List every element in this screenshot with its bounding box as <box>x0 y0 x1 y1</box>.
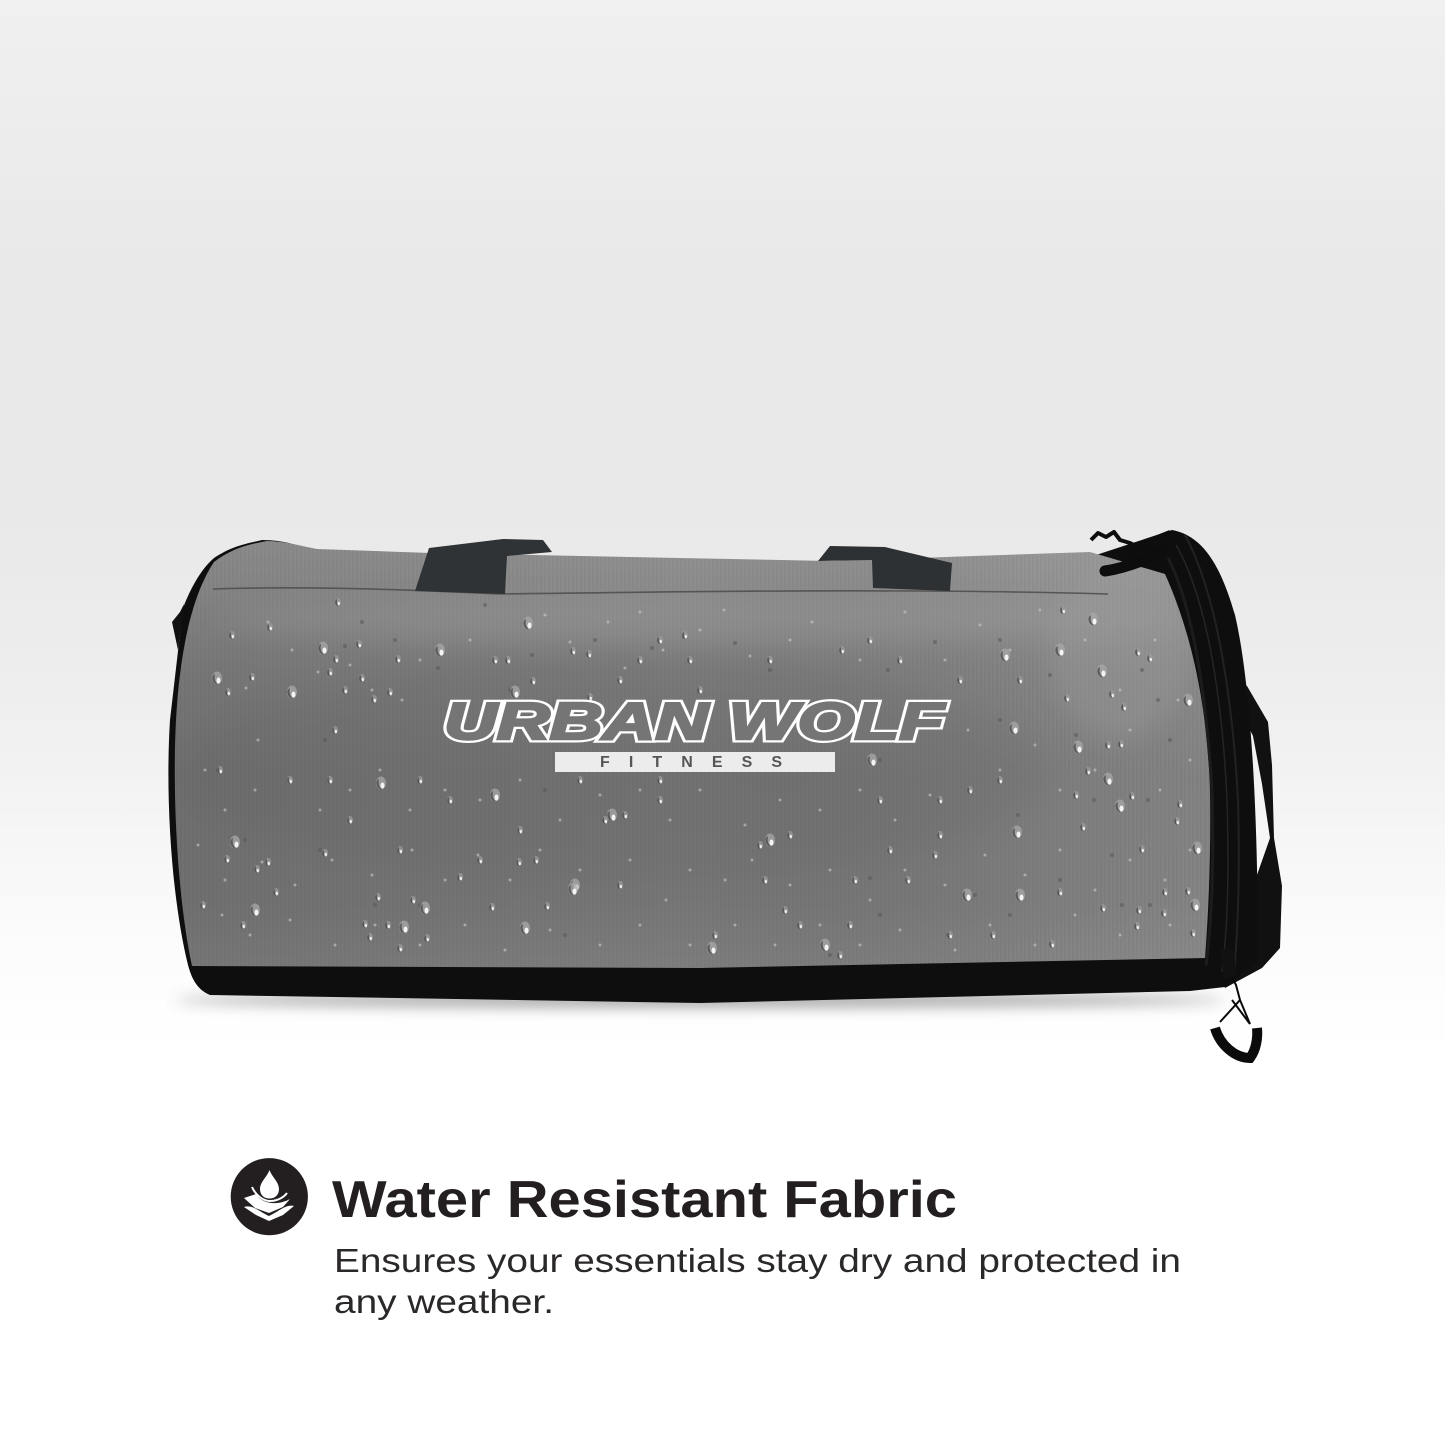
left side bulge <box>172 604 184 650</box>
side zipper panel <box>1168 535 1239 975</box>
back body edge <box>168 530 1258 1003</box>
fabric panel <box>175 541 1210 968</box>
FITNESS label <box>555 752 835 772</box>
duffel bag <box>168 530 1282 1058</box>
water droplets <box>198 598 1202 959</box>
heading: Water Resistant Fabric <box>332 1171 957 1229</box>
description: any weather. <box>334 1284 554 1321</box>
icon: water resistant fabric <box>231 1158 308 1235</box>
feature caption <box>231 1158 1181 1321</box>
zipper pull: bottom tab and hook <box>1215 948 1257 1058</box>
right handle <box>818 546 952 591</box>
FITNESS label: FITNESS <box>600 754 782 771</box>
top seam <box>213 588 1108 594</box>
brand logo <box>444 693 946 772</box>
URBAN WOLF wordmark: URBAN WOLF <box>444 693 946 751</box>
description <box>334 1243 1181 1321</box>
description: Ensures your essentials stay dry and protected in <box>334 1243 1181 1280</box>
zipper pull: top <box>1091 532 1170 571</box>
shoulder strap <box>1215 680 1282 988</box>
ground shadow <box>175 993 1225 1007</box>
medium droplets <box>200 598 1196 959</box>
URBAN WOLF wordmark: URBAN WOLF <box>444 693 946 751</box>
fabric shading <box>190 560 1190 880</box>
large droplets <box>212 612 1202 954</box>
left handle <box>415 539 552 594</box>
